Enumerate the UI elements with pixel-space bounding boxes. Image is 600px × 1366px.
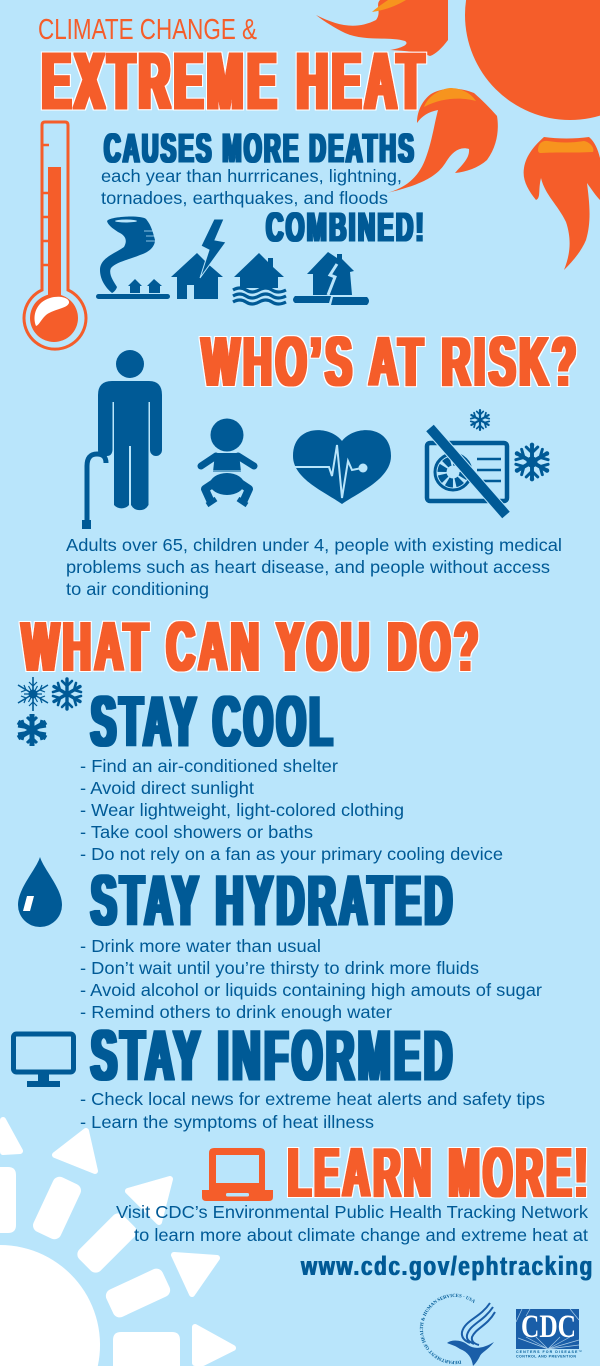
heading: combined: COMBINED! (266, 204, 426, 250)
list: stay cool tips: - Do not rely on a fan as your primary cooling device (80, 844, 503, 864)
list: stay cool tips: - Wear lightweight, light-colored clothing (80, 800, 404, 820)
icon: snowflakes (18, 677, 81, 746)
text: visit cdc: Visit CDC’s Environmental Public Health Tracking Network (116, 1202, 588, 1222)
text: deaths explanation (101, 166, 402, 208)
list: stay cool tips: - Take cool showers or baths (80, 822, 313, 842)
icon: heart with heartbeat (293, 430, 391, 504)
icon: earthquake house (293, 252, 369, 305)
logo: cdc (516, 1309, 582, 1358)
icon: baby (201, 418, 254, 505)
list: stay hydrated tips: - Don’t wait until you’re thirsty to drink more fluids (80, 958, 479, 978)
list: stay cool tips: - Avoid direct sunlight (80, 778, 254, 798)
logo: cdc: CONTROL AND PREVENTION (516, 1354, 576, 1358)
text: who is at risk: to air conditioning (66, 579, 209, 599)
icon: flooded house (233, 253, 286, 304)
logo: cdc: CDC (521, 1309, 576, 1345)
list: stay informed tips (80, 1089, 545, 1132)
text: deaths explanation: each year than hurrricanes, lightning, (101, 166, 402, 186)
list: stay hydrated tips: - Drink more water than usual (80, 936, 321, 956)
sun illustration (316, 0, 600, 270)
icon: large snowflake (516, 445, 548, 479)
list: stay hydrated tips: - Remind others to drink enough water (80, 1002, 392, 1022)
text: who is at risk (66, 535, 562, 599)
icon: tornado (96, 217, 170, 299)
icon: small snowflake (471, 410, 489, 430)
list: stay cool tips (80, 756, 503, 864)
list: stay hydrated tips (80, 936, 542, 1022)
icon: laptop (202, 1148, 273, 1201)
logo: health and human services: DEPARTMENT OF HEALTH & HUMAN SERVICES · USA (420, 1294, 475, 1364)
list: stay cool tips: - Find an air-conditioned shelter (80, 756, 338, 776)
title: climate change: CLIMATE CHANGE & (38, 14, 257, 46)
logo: cdc: CENTERS FOR DISEASE™ (516, 1350, 582, 1354)
list: stay informed tips: - Check local news for extreme heat alerts and safety tips (80, 1089, 545, 1109)
thermometer (24, 122, 86, 349)
icon: water drop (18, 857, 62, 927)
list: stay hydrated tips: - Avoid alcohol or liquids containing high amouts of sugar (80, 980, 542, 1000)
icon: elderly person with cane (82, 350, 162, 529)
text: who is at risk: Adults over 65, children under 4, people with existing medical (66, 535, 562, 555)
heading: stay cool: STAY COOL (91, 683, 336, 762)
text: who is at risk: problems such as heart disease, and people without access (66, 557, 550, 577)
list: stay informed tips: - Learn the symptoms of heat illness (80, 1112, 374, 1132)
icon: lightning strikes house (171, 219, 226, 299)
icon: computer monitor (14, 1034, 74, 1087)
text: visit cdc (116, 1202, 588, 1245)
white sun decoration (0, 1120, 233, 1366)
text: visit cdc: to learn more about climate change and extreme heat at (134, 1225, 588, 1245)
icon: no air conditioning (427, 428, 507, 515)
text: deaths explanation: tornadoes, earthquakes, and floods (101, 188, 388, 208)
